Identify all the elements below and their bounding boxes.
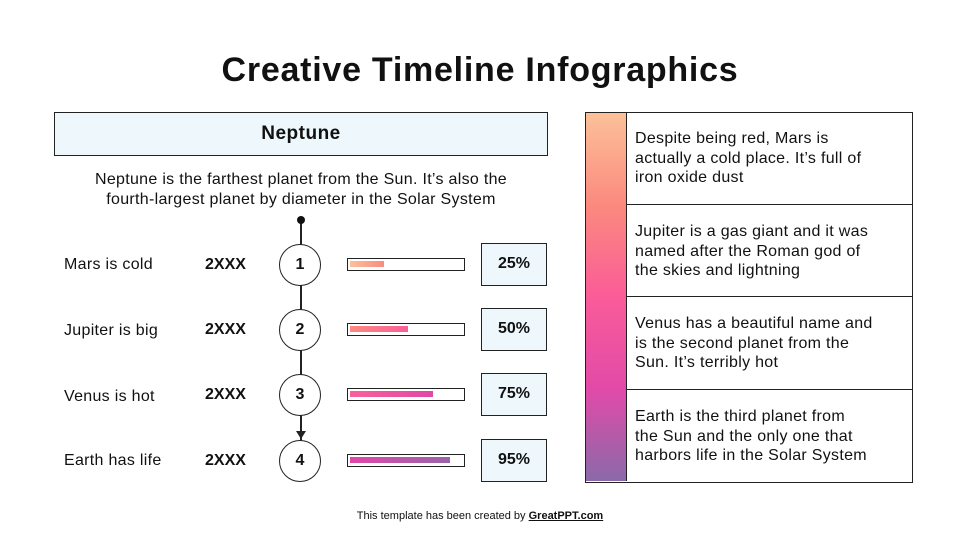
arrow head — [296, 431, 306, 439]
table row 3 text: Venus has a beautiful name and — [635, 315, 873, 332]
table row 1 text — [626, 112, 912, 205]
row 1: 1 — [296, 256, 304, 273]
table row 1 text: iron oxide dust — [635, 169, 744, 186]
row 1: Mars is cold — [64, 256, 153, 273]
table row 2 text: named after the Roman god of — [635, 242, 860, 260]
row 4: 2XXX — [205, 452, 246, 469]
row 4 — [64, 439, 547, 482]
table row 1 text: Despite being red, Mars is — [635, 130, 829, 147]
title: Creative Timeline Infographics — [222, 51, 738, 89]
row 4: 4 — [296, 452, 304, 469]
header box: Neptune — [54, 112, 548, 156]
right table panel — [585, 112, 913, 483]
timeline line — [300, 219, 302, 441]
table row 2 text — [626, 205, 912, 297]
timeline start dot — [297, 216, 305, 224]
footer: This template has been created by GreatPPT.com — [357, 510, 603, 522]
row 1: 25% — [498, 255, 530, 272]
row 2: 2 — [296, 321, 304, 338]
row 3: 3 — [296, 386, 304, 403]
table row 3 text — [626, 297, 912, 390]
gradient strip — [586, 113, 627, 481]
row 2: 2XXX — [205, 321, 246, 338]
table row 4 text — [635, 408, 867, 464]
table row 2 text: Jupiter is a gas giant and it was — [635, 223, 868, 240]
table row 3 text: Sun. It’s terribly hot — [635, 354, 778, 371]
description text: fourth-largest planet by diameter in the Solar System — [106, 190, 496, 208]
table row 4 text: Earth is the third planet from — [635, 408, 845, 425]
row 1: 2XXX — [205, 256, 246, 273]
row 2 — [64, 308, 547, 351]
row 4: 95% — [498, 451, 530, 468]
row 2: 50% — [498, 320, 530, 337]
description text: Neptune is the farthest planet from the Sun. It’s also the — [95, 171, 507, 188]
description text — [95, 171, 507, 208]
table row 4 text: the Sun and the only one that — [635, 428, 853, 444]
header box: Neptune: Neptune — [261, 123, 341, 144]
row 3: 75% — [498, 385, 530, 402]
row 3 — [64, 373, 547, 416]
table row 3 text: is the second planet from the — [635, 334, 849, 352]
row 3: Venus is hot — [64, 388, 155, 405]
row 3: 2XXX — [205, 386, 246, 403]
row 2: Jupiter is big — [64, 322, 158, 339]
table row 1 text: actually a cold place. It’s full of — [635, 150, 861, 166]
row 4: Earth has life — [64, 452, 162, 469]
table row 2 text: the skies and lightning — [635, 262, 800, 279]
table row 4 text: harbors life in the Solar System — [635, 447, 867, 464]
row 1 — [64, 243, 547, 286]
